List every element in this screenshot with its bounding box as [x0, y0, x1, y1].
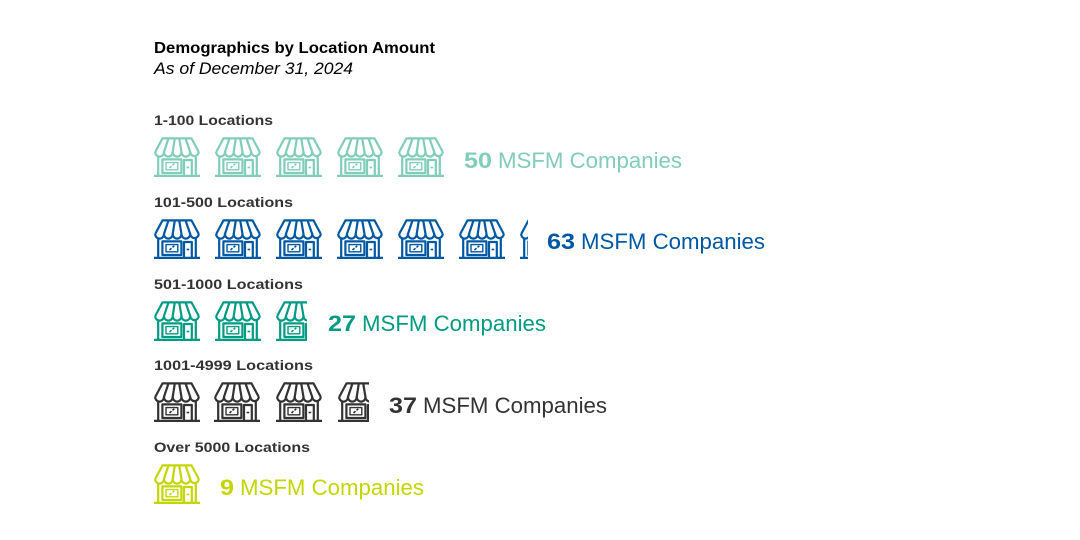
row: 501-1000 locations	[154, 276, 546, 340]
icon row: storefronts	[154, 383, 384, 421]
row: 1001-4999 locations	[154, 357, 607, 421]
value: 63: 63	[547, 229, 575, 254]
value: 50: 50	[464, 148, 492, 173]
row label: 101-500 Locations	[154, 194, 293, 210]
row: over 5000 locations	[154, 439, 424, 503]
row label: Over 5000 Locations	[154, 439, 310, 455]
value: 9: 9	[220, 475, 234, 500]
icon row: storefronts	[154, 138, 444, 176]
icon: storefront	[154, 465, 200, 503]
value caption: MSFM Companies	[498, 148, 682, 173]
row label: 1001-4999 Locations	[154, 357, 313, 373]
value caption: MSFM Companies	[423, 393, 607, 418]
value: 27: 27	[328, 311, 356, 336]
row: 1-100 locations	[154, 112, 682, 176]
value: 37: 37	[389, 393, 417, 418]
row label: 501-1000 Locations	[154, 276, 303, 292]
title: Demographics by Location Amount	[154, 40, 436, 57]
row: 101-500 locations	[154, 194, 765, 258]
subtitle: date: As of December 31, 2024	[153, 59, 353, 78]
value caption: MSFM Companies	[581, 229, 765, 254]
icon row: storefronts	[154, 302, 322, 340]
icon row: storefronts	[154, 220, 566, 258]
value caption: MSFM Companies	[240, 475, 424, 500]
value caption: MSFM Companies	[362, 311, 546, 336]
row label: 1-100 Locations	[154, 112, 273, 128]
